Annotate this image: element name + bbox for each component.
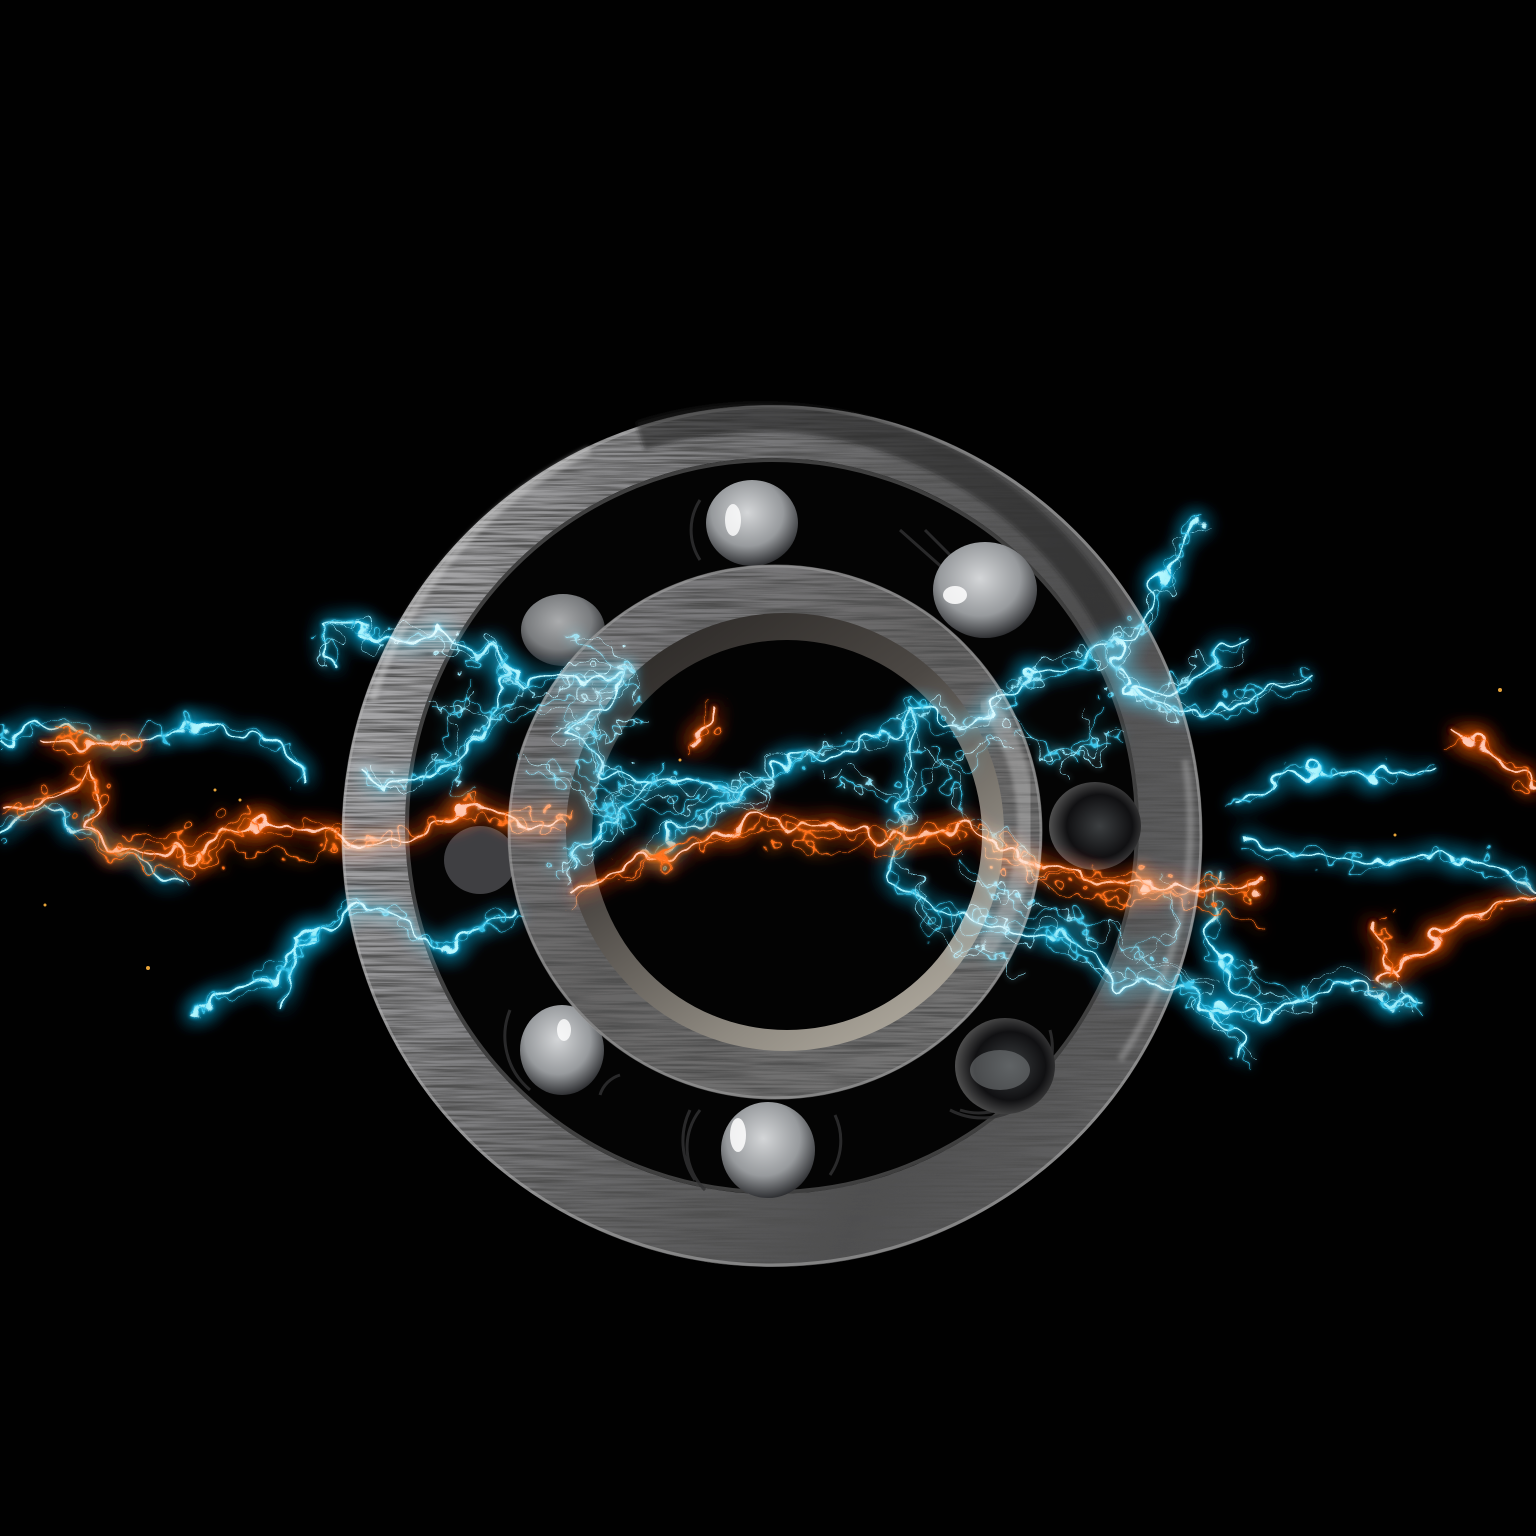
- arcs: blue fine: [320, 520, 1420, 1060]
- arcs: orange secondary: [0, 705, 1536, 985]
- sparks: [44, 688, 1502, 970]
- arcs: orange main: [0, 705, 1536, 985]
- arcs: blue secondary: [0, 520, 1530, 1060]
- ball: lower left: [520, 1005, 604, 1095]
- outer ring: [342, 405, 1202, 1267]
- arcs: blue main: [0, 520, 1530, 1060]
- ball: upper left: [521, 594, 605, 666]
- bearing: [342, 405, 1202, 1267]
- inner ring: [508, 565, 1042, 1099]
- ball: top: [706, 480, 798, 566]
- ball: bottom: [721, 1102, 815, 1198]
- ball shadows and cage: [505, 500, 1052, 1190]
- ball: left: [444, 826, 516, 894]
- lightning: [0, 520, 1536, 1060]
- ball: right: [1049, 782, 1141, 870]
- ball: lower right: [955, 1018, 1055, 1114]
- ball: upper right: [933, 542, 1037, 638]
